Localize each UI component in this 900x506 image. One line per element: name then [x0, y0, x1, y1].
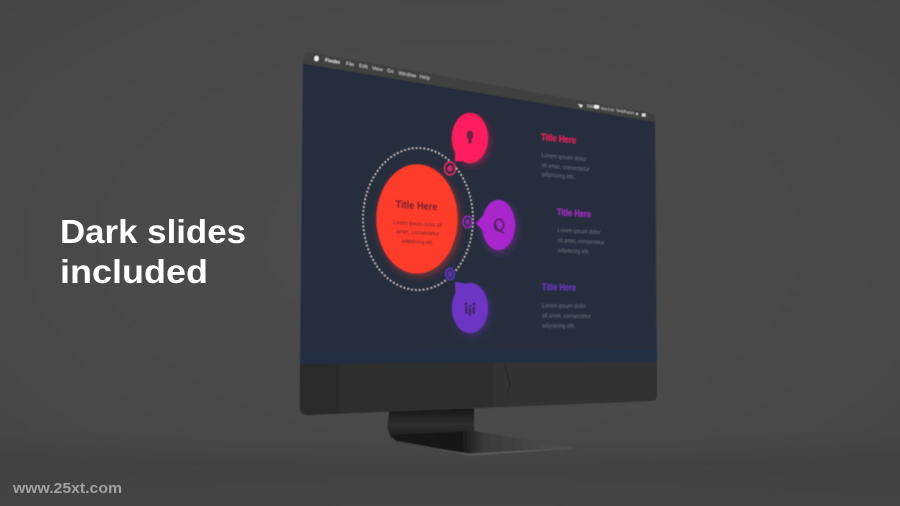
monitor stand	[388, 408, 575, 456]
text block: pink	[541, 132, 590, 181]
icon: phone	[494, 219, 504, 233]
headline: included	[60, 253, 208, 290]
monitor	[300, 52, 657, 415]
central circle: amet, consectetur	[396, 229, 440, 238]
text block: pink: sit amet, consectetur	[542, 163, 590, 173]
text block: magenta: adipiscing elit.	[558, 248, 590, 256]
menu bar: File	[346, 61, 354, 68]
status icons: 100%	[586, 103, 597, 110]
text block: magenta: Title Here	[557, 207, 591, 220]
status icons: TemplFusion	[616, 108, 634, 115]
menu bar	[303, 52, 655, 123]
headline: Dark slides	[60, 213, 246, 250]
node: violet	[446, 268, 454, 280]
headline	[60, 213, 246, 290]
central circle: Title Here	[396, 199, 438, 213]
menu bar: Window	[398, 71, 417, 79]
text block: violet: adipiscing elit.	[542, 324, 575, 330]
bubble: violet	[452, 282, 490, 336]
text block: magenta	[557, 207, 604, 256]
stand foot	[391, 431, 575, 456]
text block: violet	[542, 282, 591, 330]
text block: pink: adipiscing elit.	[542, 172, 575, 181]
status icons	[578, 103, 646, 116]
bubble: magenta	[476, 200, 517, 253]
node: pink	[444, 162, 456, 175]
menu bar: View	[372, 66, 383, 73]
text block: violet: Title Here	[542, 282, 576, 294]
menu bar: Finder	[325, 58, 340, 66]
menu bar: Go	[387, 68, 394, 75]
text block: violet: sit amet, consectetur	[542, 314, 591, 320]
menu bar: Help	[419, 74, 430, 82]
apple logo	[314, 56, 319, 61]
icon: light bulb	[466, 130, 474, 144]
node: magenta	[463, 216, 472, 228]
stand neck	[388, 408, 474, 438]
bubble: pink	[452, 113, 490, 166]
menu bar: Edit	[359, 63, 368, 71]
icon: team	[464, 302, 476, 316]
text block: magenta: Lorem ipsum dolor	[558, 228, 601, 236]
central diagram	[363, 113, 517, 336]
text block: pink: Lorem ipsum dolor	[542, 153, 587, 163]
text block: magenta: sit amet, consectetur	[558, 238, 605, 246]
screen	[300, 64, 657, 364]
status icons: Mon 5:00	[601, 106, 615, 113]
central circle	[376, 164, 460, 276]
text block: pink: Title Here	[541, 132, 576, 146]
text block: violet: Lorem ipsum dolor	[542, 304, 586, 310]
dotted ring	[363, 148, 473, 290]
monitor chin	[300, 360, 657, 415]
watermark: www.25xt.com	[12, 481, 122, 497]
central circle: adipiscing elit.	[402, 239, 434, 246]
central circle: Lorem ipsum dolor sit	[393, 220, 442, 229]
